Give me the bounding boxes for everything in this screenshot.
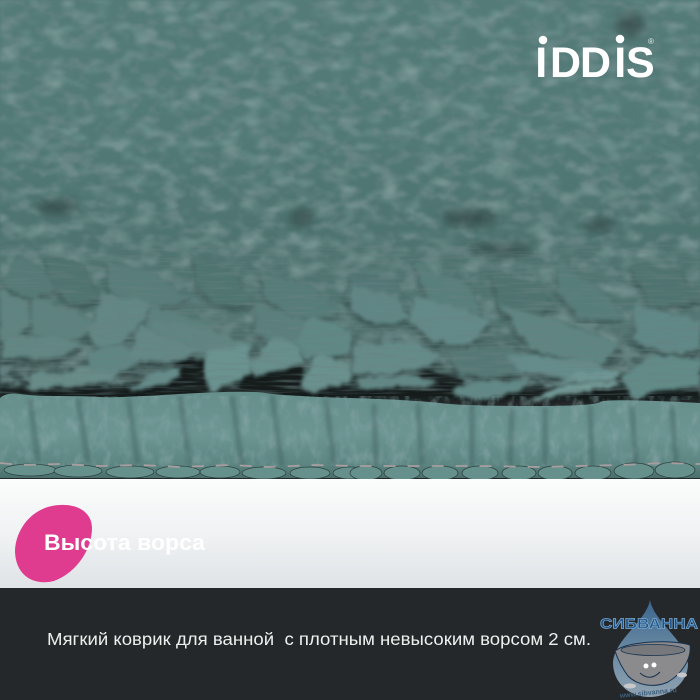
photo: stitched mat border band: [0, 392, 700, 480]
icon: water drop: [613, 600, 688, 697]
logo: registered mark: ®: [648, 37, 654, 46]
heading: pile height: Высота ворса: [44, 530, 206, 555]
icon: pink blob: [15, 505, 92, 582]
text block: product description: Мягкий коврик для ванной с плотным невысоким ворсом 2 см.: [47, 629, 591, 649]
pile tufts: back rows: [0, 250, 700, 320]
panel: dark caption bar: [0, 588, 700, 700]
logo: Sibvanna watermark: [600, 600, 698, 700]
twisted yarn wraps: [30, 395, 676, 466]
photo: teal bath mat pile: [0, 0, 700, 404]
pile tufts: front row: [2, 325, 700, 404]
bottom stitch loops: [4, 462, 695, 480]
dark hollows in the blurred pile: [37, 13, 644, 256]
icon: bathtub character: [615, 642, 690, 688]
dark gaps beneath the front tufts: [0, 358, 700, 402]
pile tufts: middle rows: [0, 285, 700, 365]
panel: white floor background: [0, 479, 700, 589]
label: brand name: СИБВАННА: [600, 616, 698, 632]
callout: pile height label with pink blob: [15, 505, 206, 582]
logo: IDDIS: IDDIS: [535, 39, 655, 87]
label: site address: www.sibvanna.ru: [618, 687, 677, 700]
